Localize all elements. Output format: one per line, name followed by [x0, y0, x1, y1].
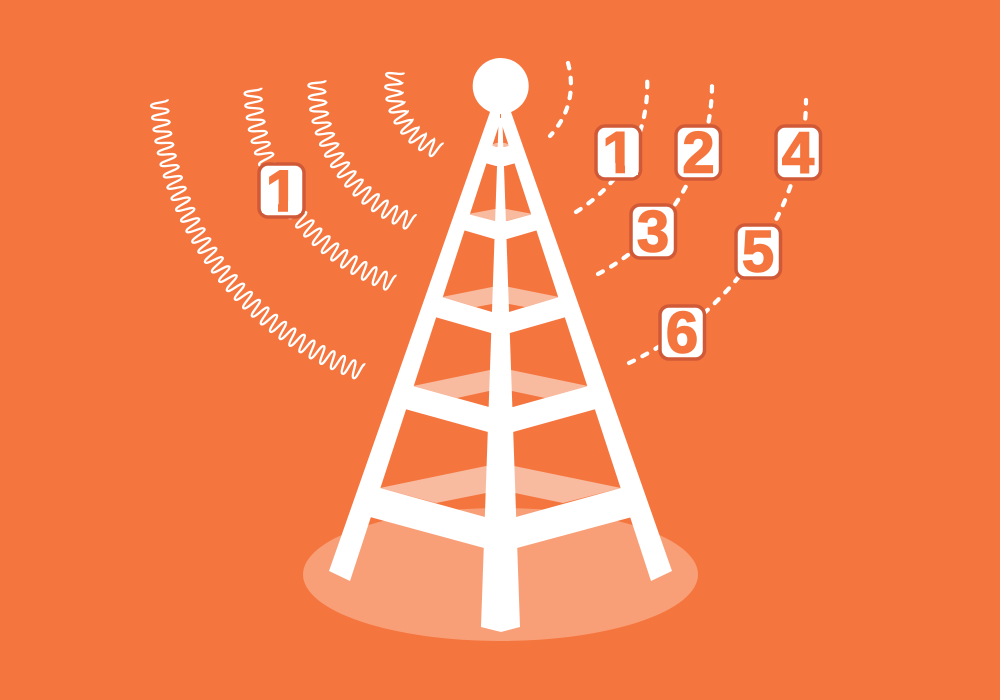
badge: right 1: 1: [602, 120, 635, 186]
radio tower: [329, 58, 672, 632]
badge: 6: 6: [666, 300, 698, 366]
wave arc third: [308, 80, 417, 231]
wave arc inner: [385, 69, 444, 159]
tower right leg: [501, 112, 672, 581]
badge: 5: 5: [742, 220, 774, 284]
ground shadow ellipse: [303, 508, 698, 641]
wave arc second: [245, 88, 397, 292]
wave arc outer: [151, 99, 365, 380]
badge: left 1: 1: [266, 159, 298, 224]
badge: 4: 4: [782, 120, 814, 186]
tower crossbars: [370, 145, 632, 548]
tower left leg: [329, 112, 500, 581]
badge: 2: 2: [682, 120, 715, 186]
dashed arc C: [598, 85, 712, 274]
dashed signal arcs: [550, 63, 806, 363]
badge: 3: 3: [637, 200, 669, 264]
tower platforms: [380, 143, 621, 503]
tower ball: [473, 58, 529, 114]
dashed arc A: [550, 63, 571, 136]
dashed arc B: [576, 75, 647, 212]
solid signal waves: [151, 69, 444, 380]
tower centre leg: [481, 118, 520, 632]
dashed arc D: [629, 100, 806, 363]
